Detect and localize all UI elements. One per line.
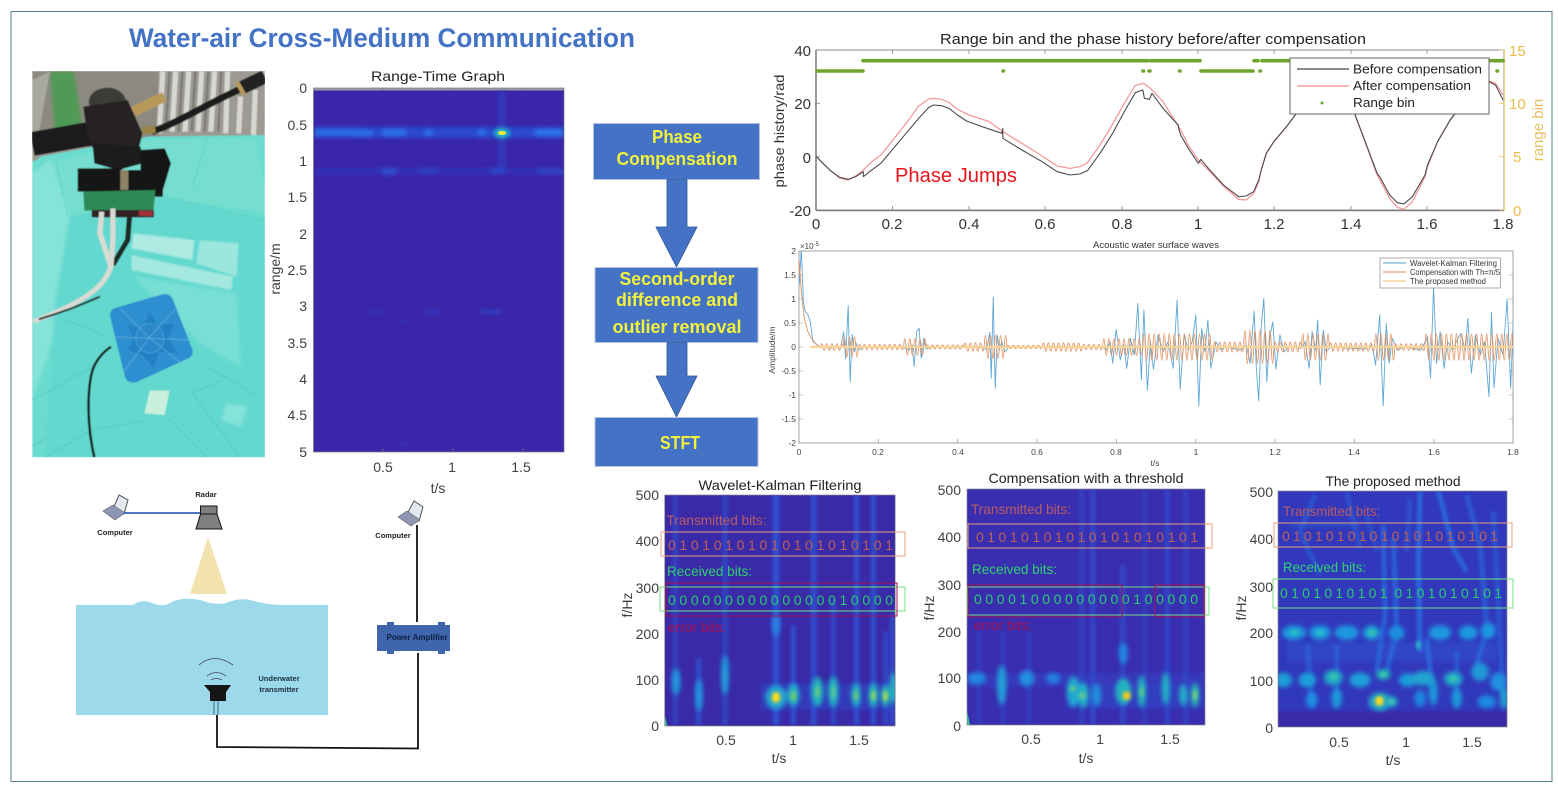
y axis: 1 (791, 294, 796, 304)
received bits: 0 0 0 0 1 0 0 0 0 0 0 0 0 0 1 0 0 0 0 0 (974, 591, 1198, 607)
box: second-order difference (595, 268, 758, 342)
diagram: experimental setup (76, 490, 450, 748)
bottom axis: 1.4 (1341, 216, 1361, 233)
box: phase compensation (594, 124, 760, 180)
spectrogram: the proposed method: t/s (1386, 752, 1400, 768)
chart: range-time graph: t/s (431, 480, 445, 496)
y axis: -1 (788, 390, 796, 400)
label: computer left: Computer (97, 528, 133, 537)
box: phase compensation: Phase (652, 127, 702, 147)
bottom axis: 0 (812, 216, 820, 233)
x axis: 1 (1194, 447, 1199, 457)
chart: phase history before/after compensation (771, 31, 1547, 233)
tick labels: 500 (1250, 484, 1273, 500)
spectrogram: wavelet-kalman filtering (619, 477, 905, 766)
received bits (967, 561, 1209, 615)
label: radar: Radar (195, 490, 217, 499)
tick labels (1250, 484, 1273, 736)
flowchart: processing steps (594, 124, 760, 466)
icon: right laptop (398, 501, 423, 526)
axis label: range bin: range bin (1530, 99, 1547, 161)
chart: range-time graph: 1 (448, 459, 456, 475)
spectrogram: compensation with a threshold: 1.5 (1160, 731, 1180, 747)
x axis: 1.2 (1269, 447, 1281, 457)
arrow: down 2 (656, 342, 697, 417)
box: STFT: STFT (660, 433, 700, 453)
bottom axis: 0.2 (882, 216, 902, 233)
cables (113, 217, 130, 265)
left axis: 40 (794, 43, 811, 60)
received bits: 0 0 0 0 0 0 0 0 0 0 0 0 0 0 0 1 0 0 0 0 (668, 592, 893, 608)
error bits (968, 585, 1204, 633)
left axis (789, 43, 811, 220)
box: second-order difference: Second-order (620, 269, 734, 289)
x axis: 1.4 (1348, 447, 1360, 457)
legend: The proposed method (1410, 277, 1486, 286)
transducer (89, 347, 111, 457)
y axis: 0 (791, 342, 796, 352)
spectrogram: the proposed method: 0.5 (1329, 734, 1349, 750)
chart: range-time graph: 1.5 (511, 459, 531, 475)
y axis: -2 (788, 438, 796, 448)
diagram: experimental setup: transmitter (259, 685, 299, 694)
spectrogram: wavelet-kalman filtering: 1.5 (849, 732, 869, 748)
chart: range-time graph: 0.5 (288, 117, 307, 133)
legend: Wavelet-Kalman Filtering (1410, 259, 1497, 268)
axis label: range: range/m (267, 243, 283, 295)
y axis: -1.5 (781, 414, 796, 424)
spectrogram: wavelet-kalman filtering: 0.5 (716, 732, 736, 748)
line: wavelet-kalman filtering (799, 248, 1513, 406)
exponent: -5 (814, 242, 820, 248)
received bits (1273, 559, 1513, 608)
bottom axis: 1 (1194, 216, 1202, 233)
left axis: -20 (789, 203, 811, 220)
tick labels: 400 (636, 533, 659, 549)
exponent: ×10 (800, 242, 814, 251)
chart: range-time graph: 2.5 (288, 262, 307, 278)
spectrogram: the proposed method: 1.5 (1462, 734, 1482, 750)
x axis: 0.8 (1110, 447, 1122, 457)
tick labels: 0 (953, 718, 961, 734)
right axis (1509, 43, 1526, 220)
bottom axis: 1.8 (1493, 216, 1513, 233)
spectrogram: wavelet-kalman filtering: 1 (789, 732, 797, 748)
y axis (781, 246, 796, 448)
heading: Compensation with a threshold (988, 470, 1184, 486)
right axis: 15 (1509, 43, 1526, 60)
tick labels: 0 (1265, 720, 1273, 736)
tick labels: 500 (938, 482, 961, 498)
range bin dots (817, 61, 1503, 71)
right axis: 10 (1509, 96, 1526, 113)
chart: range-time graph: 2 (299, 226, 307, 242)
tick labels: 500 (636, 487, 659, 503)
line: compensation with threshold (799, 262, 1513, 364)
tick labels: 200 (938, 624, 961, 640)
power amplifier: Power Amplifier (386, 633, 448, 642)
chart: range-time graph: 4.5 (288, 407, 307, 423)
legend: After compensation (1353, 78, 1471, 93)
transmitted bits: 0 1 0 1 0 1 0 1 0 1 0 1 0 1 0 1 0 1 0 1 (1282, 528, 1498, 544)
error bits: error bits: (974, 617, 1032, 633)
chart: range-time graph: 1.5 (288, 189, 307, 205)
cable: computer to amplifier (416, 525, 418, 622)
legend (1380, 258, 1501, 288)
beam (190, 537, 227, 594)
legend: Range bin (1353, 95, 1415, 110)
spectrogram: compensation with a threshold (921, 470, 1212, 766)
spectrogram: compensation with a threshold: t/s (1079, 750, 1093, 766)
right axis: 5 (1513, 149, 1521, 166)
transmitted bits: Transmitted bits: (1283, 503, 1380, 519)
y axis: 2 (791, 246, 796, 256)
tick labels: 200 (1250, 625, 1273, 641)
x axis: 1.8 (1507, 447, 1519, 457)
icon: radar (196, 506, 222, 529)
chart: range-time graph (267, 68, 564, 496)
right axis: 0 (1513, 203, 1521, 220)
heading: Wavelet-Kalman Filtering (698, 477, 862, 493)
tick labels: 100 (1250, 673, 1273, 689)
spectrogram: the proposed method: 1 (1402, 734, 1410, 750)
heading: phase chart title: Range bin and the phase history before/after compensation (940, 31, 1366, 48)
tick labels: 200 (636, 626, 659, 642)
left axis: 20 (794, 96, 811, 113)
curve: before compensation (816, 82, 1503, 204)
annotation: phase jumps: Phase Jumps (895, 165, 1017, 187)
chart: range-time graph: 3.5 (288, 335, 307, 351)
x axis: 0.6 (1031, 447, 1043, 457)
tick labels: 300 (636, 580, 659, 596)
arrow: down 1 (656, 180, 697, 267)
axis label: amplitude: Amplitude/m (767, 326, 777, 374)
power amplifier (377, 622, 450, 654)
chart: acoustic water surface waves (767, 240, 1519, 468)
pipes (32, 128, 137, 144)
bottom axis: 0.6 (1035, 216, 1055, 233)
photo: radar above water tank with transducer (32, 71, 265, 457)
error bits (666, 583, 897, 635)
box: second-order difference: difference and (616, 290, 738, 310)
x axis (797, 447, 1519, 468)
tick labels: 300 (938, 577, 961, 593)
spectrogram: compensation with a threshold: f/Hz (921, 596, 937, 620)
heading: The proposed method (1326, 473, 1460, 489)
transmitted bits: 0 1 0 1 0 1 0 1 0 1 0 1 0 1 0 1 0 1 0 1 (976, 529, 1198, 545)
transmitted bits: Transmitted bits: (971, 501, 1071, 517)
tick labels: 300 (1250, 579, 1273, 595)
transmitted bits: Transmitted bits: (666, 512, 766, 528)
received bits (660, 563, 905, 611)
x axis: 0.4 (952, 447, 964, 457)
tick labels: 400 (938, 529, 961, 545)
transmitted bits (661, 512, 905, 556)
tick labels (636, 487, 659, 734)
bottom axis: 1.6 (1417, 216, 1437, 233)
title: Water-air Cross-Medium Communication (129, 23, 635, 53)
transmitted bits (1274, 503, 1512, 547)
tick labels: 100 (938, 670, 961, 686)
bottom axis: 0.4 (959, 216, 979, 233)
legend: Before compensation (1353, 62, 1482, 76)
heading: range-time graph: Range-Time Graph (371, 68, 505, 84)
received bits: Received bits: (1283, 559, 1366, 575)
received bits: 0 1 0 1 0 1 0 1 0 1 0 1 0 1 0 1 0 1 0 1 (1280, 585, 1502, 601)
y axis: -0.5 (781, 366, 796, 376)
chart: range-time graph: 3 (299, 298, 307, 314)
y axis: 0.5 (784, 318, 796, 328)
mount (88, 87, 126, 106)
spectrogram: compensation with a threshold: 0.5 (1021, 731, 1041, 747)
received bits: Received bits: (972, 561, 1057, 577)
spectrogram: compensation with a threshold: 1 (1096, 731, 1104, 747)
line: proposed method (810, 346, 1513, 348)
cable: transmitter to amplifier (217, 653, 418, 748)
error bits: error bits: (668, 619, 726, 635)
chart: range-time graph: 4 (299, 371, 307, 387)
x axis: 1.6 (1428, 447, 1440, 457)
chart: range-time graph: 0.5 (373, 459, 393, 475)
x axis: 0 (797, 447, 802, 457)
label: computer right: Computer (375, 531, 411, 540)
received bits: Received bits: (667, 563, 752, 579)
tick labels (938, 482, 961, 734)
spectrogram: wavelet-kalman filtering: f/Hz (619, 593, 635, 617)
left axis: 0 (803, 150, 811, 167)
bottom axis: 0.8 (1112, 216, 1132, 233)
axis label: phase history: phase history/rad (771, 74, 787, 188)
tick labels: 400 (1250, 531, 1273, 547)
x axis: 0.2 (872, 447, 884, 457)
chart: range-time graph: 1 (299, 153, 307, 169)
spectrogram: the proposed method (1233, 473, 1513, 768)
icon: left laptop (103, 495, 128, 520)
heading: acoustic chart title: Acoustic water surface waves (1093, 240, 1219, 251)
box: phase compensation: Compensation (616, 149, 738, 169)
legend (1290, 58, 1489, 114)
chart: range-time graph: 0 (299, 80, 307, 96)
spectrogram: wavelet-kalman filtering: t/s (772, 750, 786, 766)
label: underwater transmitter: Underwater (258, 674, 300, 683)
transmitted bits (968, 501, 1212, 548)
tick labels: 0 (651, 718, 659, 734)
tick labels: 100 (636, 672, 659, 688)
spectrogram: the proposed method: f/Hz (1233, 596, 1249, 620)
y axis: 1.5 (784, 270, 796, 280)
box: STFT (595, 418, 758, 466)
box: second-order difference: outlier removal (612, 317, 742, 337)
x axis: t/s (1151, 458, 1159, 468)
water (76, 599, 328, 715)
bottom axis: 1.2 (1264, 216, 1284, 233)
bottom axis (812, 216, 1513, 233)
chart: range-time graph: 5 (299, 444, 307, 460)
line: computer to radar (123, 512, 200, 514)
icon: transmitter (199, 658, 233, 715)
curve: after compensation (816, 81, 1503, 209)
legend: Compensation with Th=π/5 (1410, 268, 1501, 277)
transmitted bits: 0 1 0 1 0 1 0 1 0 1 0 1 0 1 0 1 0 1 0 1 (668, 537, 893, 553)
